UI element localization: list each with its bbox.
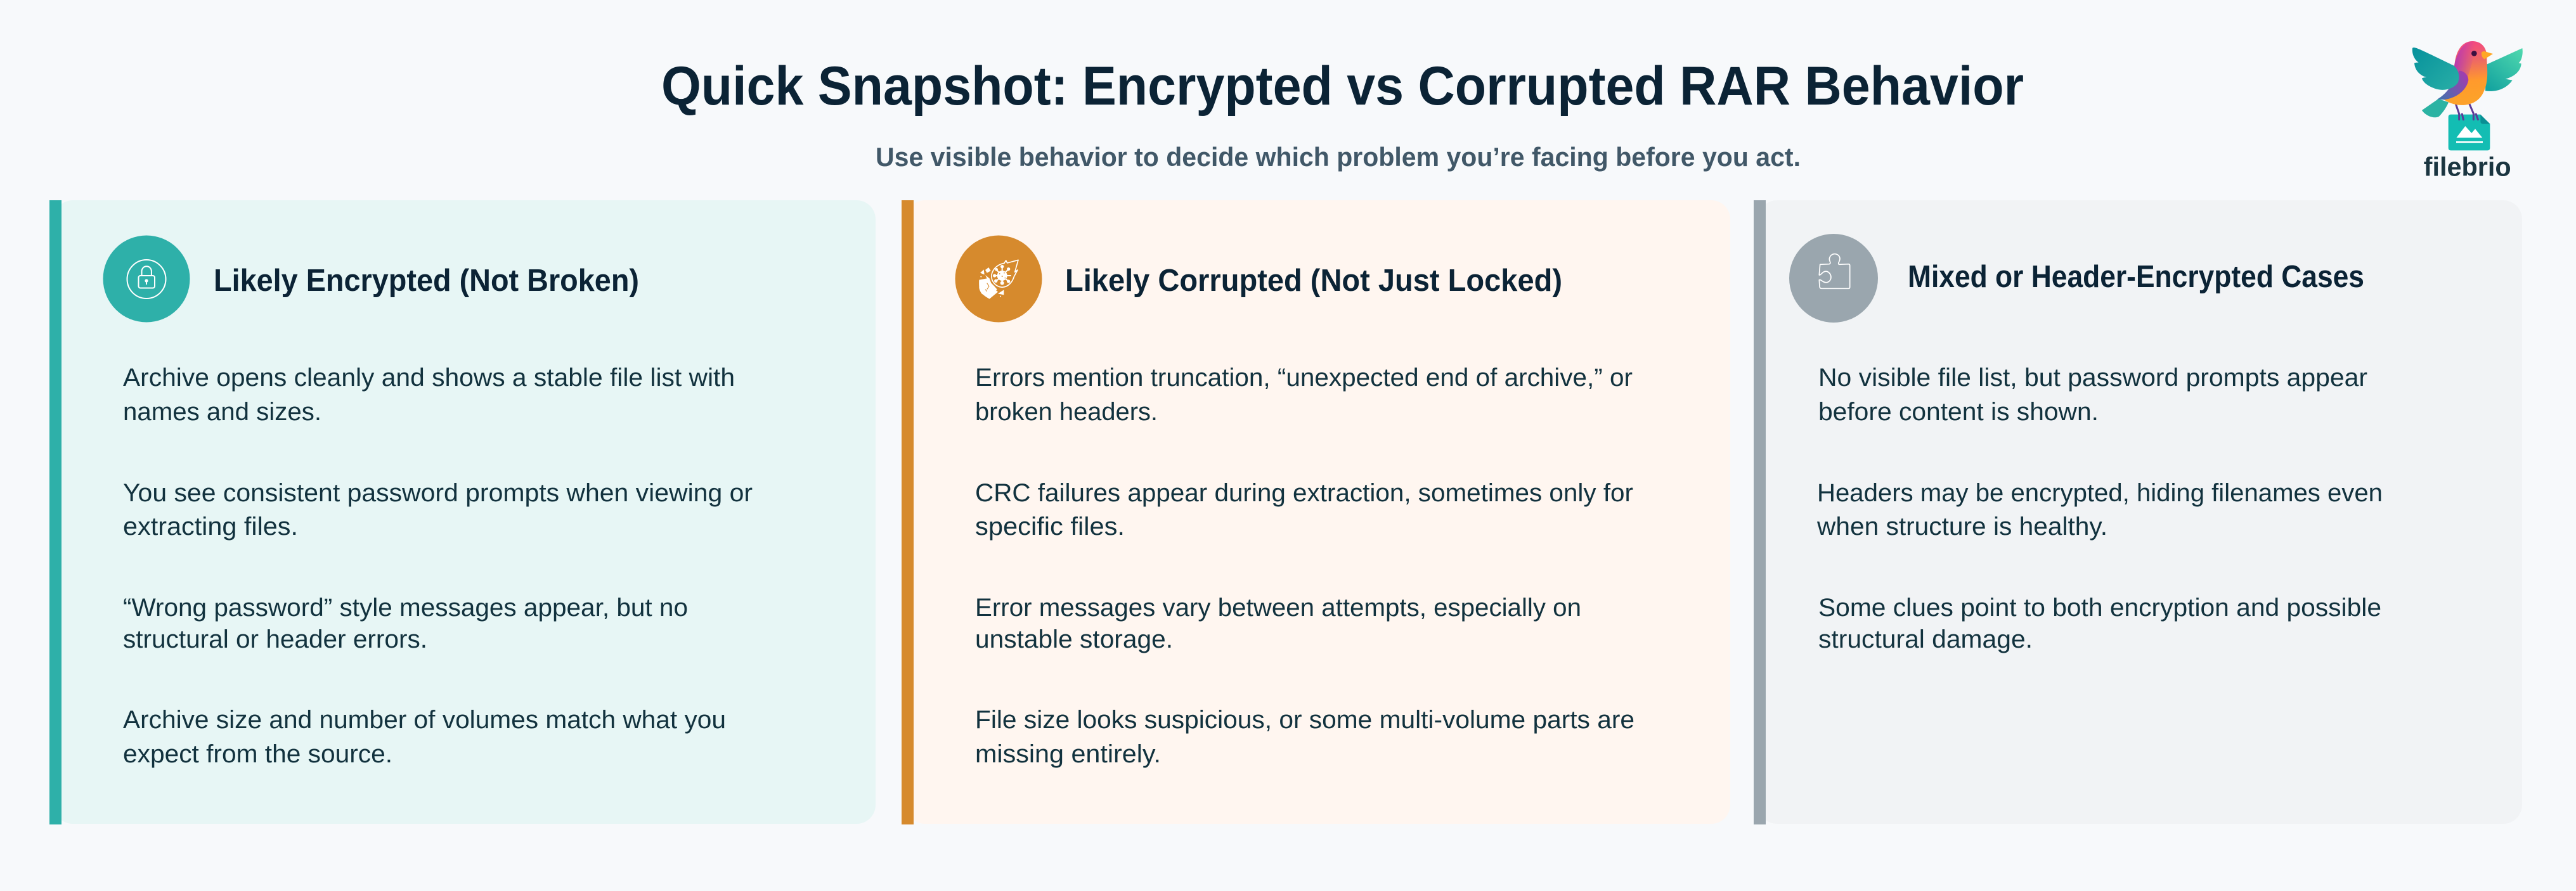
point 1: No visible file list, but password prompts appear: [1818, 364, 2367, 392]
point 1: [123, 364, 735, 426]
file mountains: [2456, 126, 2482, 138]
point 3: [1818, 594, 2381, 653]
point 4: [123, 706, 726, 768]
toes on file: [2459, 114, 2478, 120]
point 2: Headers may be encrypted, hiding filenames even: [1817, 479, 2383, 507]
icon: lock: [103, 236, 190, 322]
point 4: missing entirely.: [975, 740, 1161, 768]
point 2: [1816, 479, 2383, 541]
point 4: expect from the source.: [123, 740, 392, 768]
point 3: structural damage.: [1818, 625, 2033, 653]
body lower stripe: [2437, 71, 2468, 99]
point 2: [123, 479, 753, 541]
point 3: structural or header errors.: [123, 625, 427, 653]
file fold: [2480, 115, 2490, 124]
body shading: [2452, 41, 2476, 89]
point 2: [975, 479, 1633, 541]
beak: [2482, 51, 2493, 59]
point 1: [975, 364, 1633, 426]
point 4: File size looks suspicious, or some multi-volume parts are: [975, 706, 1634, 734]
point 1: names and sizes.: [123, 398, 321, 426]
card background: [54, 200, 876, 824]
heading: Likely Encrypted (Not Broken): [214, 264, 639, 298]
point 4: [975, 706, 1634, 768]
point 3: [975, 594, 1581, 653]
file line: [2456, 141, 2483, 143]
logo: filebrio bird on file: [2412, 41, 2523, 181]
legs: [2456, 103, 2474, 115]
point 2: You see consistent password prompts when viewing or: [123, 479, 753, 507]
wordmark: filebrio: [2424, 151, 2511, 181]
panel: mixed or header-encrypted: [1754, 200, 2522, 824]
point 3: “Wrong password” style messages appear, but no: [123, 594, 688, 622]
title: Quick Snapshot: Encrypted vs Corrupted RAR Behavior: [661, 56, 2024, 117]
card background: [906, 200, 1730, 824]
body: [2444, 41, 2487, 105]
accent bar: [49, 200, 61, 824]
card background: [1758, 200, 2522, 824]
subtitle: Use visible behavior to decide which problem you’re facing before you act.: [876, 142, 1801, 172]
point 4: Archive size and number of volumes match what you: [123, 706, 726, 734]
left wing: [2412, 48, 2459, 90]
point 1: Errors mention truncation, “unexpected end of archive,” or: [975, 364, 1633, 392]
point 1: broken headers.: [975, 398, 1158, 426]
point 1: [1818, 364, 2367, 426]
point 3: Some clues point to both encryption and possible: [1818, 594, 2381, 622]
point 3: [123, 594, 688, 653]
accent bar: [1754, 200, 1766, 824]
icon: broken shield and virus flame: [955, 236, 1042, 322]
accent bar: [902, 200, 914, 824]
file: [2449, 115, 2490, 150]
point 3: Error messages vary between attempts, especially on: [975, 594, 1581, 622]
heading: Likely Corrupted (Not Just Locked): [1065, 264, 1562, 298]
point 1: before content is shown.: [1818, 398, 2099, 426]
eye: [2471, 51, 2477, 56]
point 3: unstable storage.: [975, 625, 1173, 653]
icon: puzzle piece: [1789, 234, 1878, 323]
point 1: Archive opens cleanly and shows a stable file list with: [123, 364, 735, 392]
heading: Mixed or Header-Encrypted Cases: [1908, 260, 2364, 294]
point 2: extracting files.: [123, 513, 298, 541]
point 2: CRC failures appear during extraction, sometimes only for: [975, 479, 1633, 507]
right wing: [2485, 48, 2523, 91]
point 2: when structure is healthy.: [1816, 513, 2107, 541]
panel: likely corrupted: [902, 200, 1730, 824]
tail: [2422, 99, 2449, 117]
panel: likely encrypted: [49, 200, 876, 824]
point 2: specific files.: [975, 513, 1125, 541]
